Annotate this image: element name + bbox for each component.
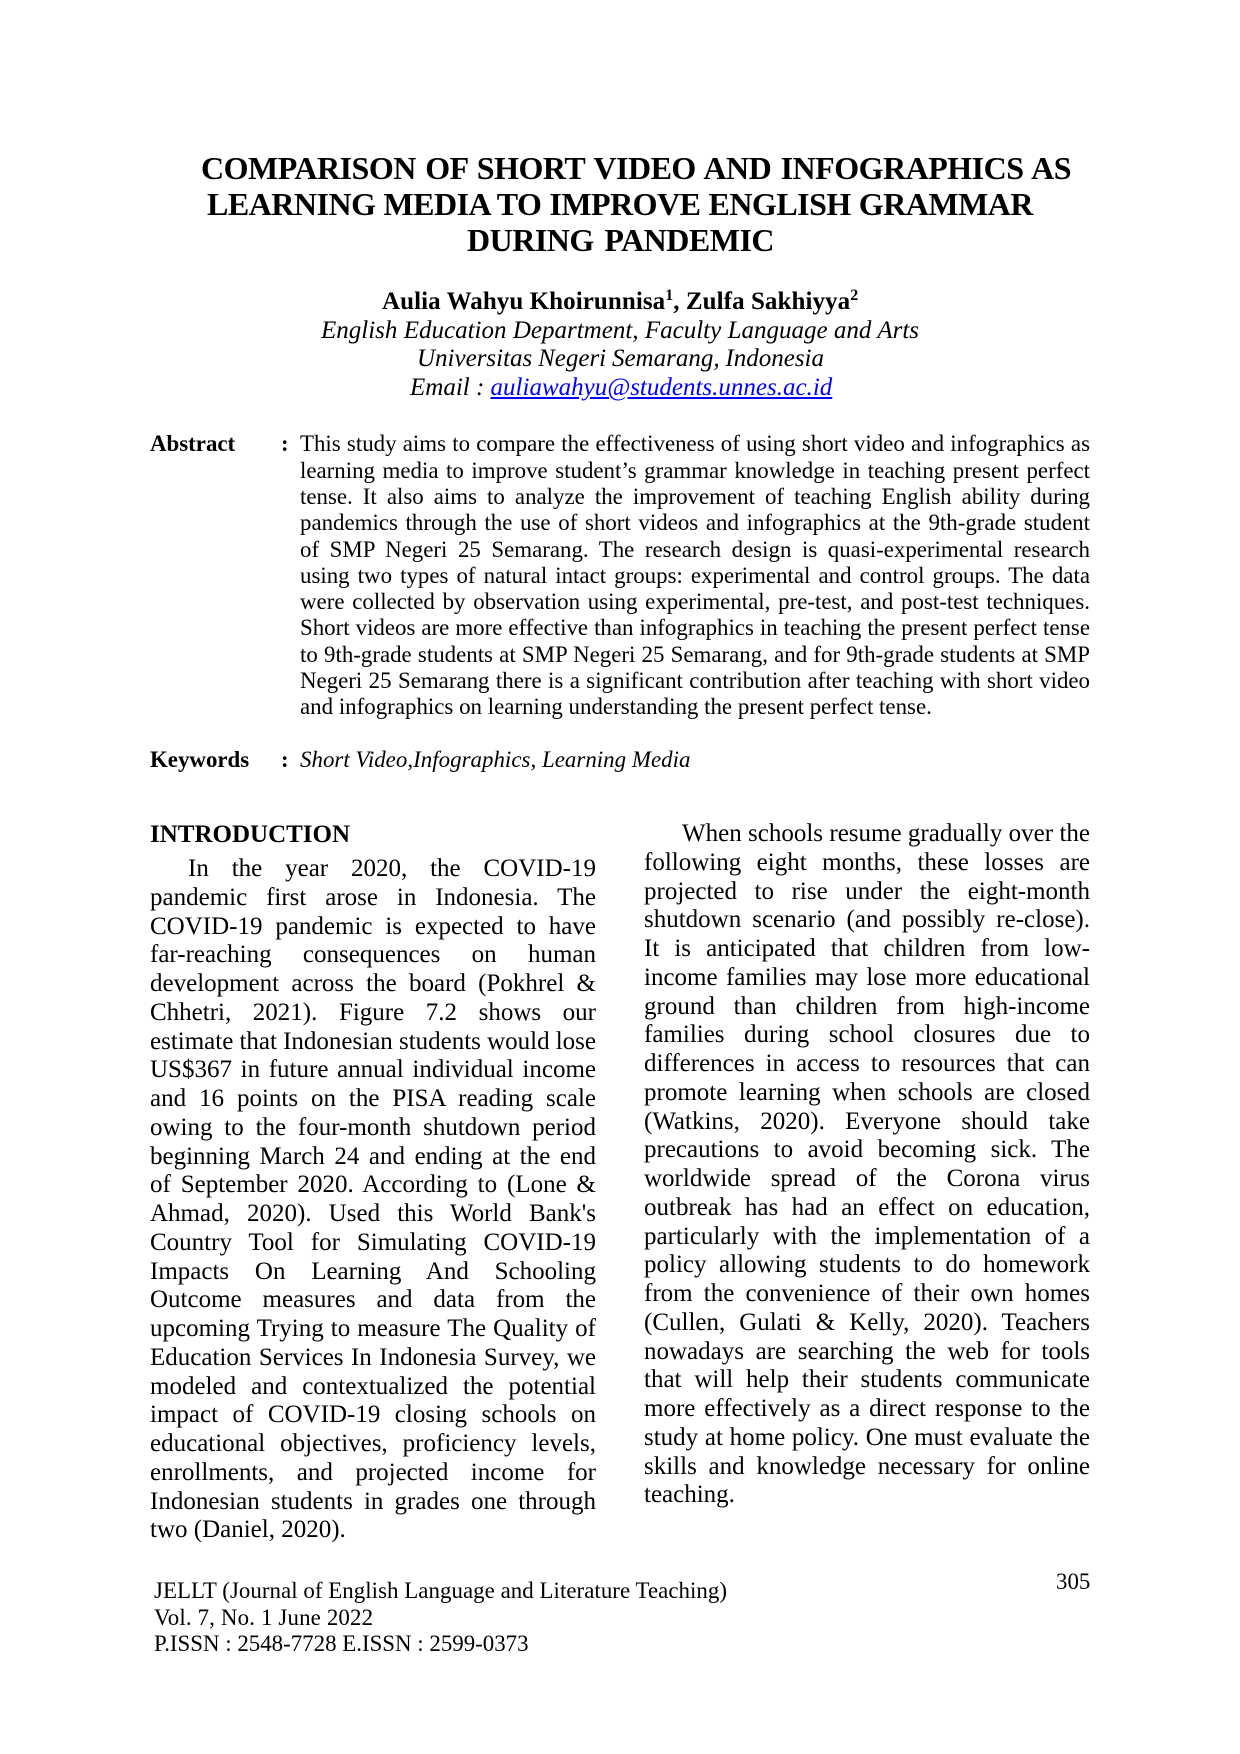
right column: text block: policy allowing students to do homework [644, 1251, 1090, 1278]
footer: journal information: P.ISSN : 2548-7728 E.ISSN : 2599-0373 [154, 1631, 529, 1656]
abstract: Short videos are more effective than infographics in teaching the present perfect tense [300, 615, 1090, 640]
text block: introduction paragraph: upcoming Trying to measure The Quality of [150, 1315, 596, 1342]
text block: introduction paragraph: impact of COVID-19 closing schools on [150, 1401, 596, 1428]
right column: text block [644, 820, 1090, 1508]
abstract: Negeri 25 Semarang there is a significant contribution after teaching with short video [300, 668, 1090, 693]
title: DURING PANDEMIC [467, 222, 774, 258]
right column: text block: ground than children from high-income [644, 992, 1090, 1020]
right column: text block: precautions to avoid becoming sick. The [644, 1136, 1090, 1163]
text block: introduction paragraph: owing to the four-month shutdown period [150, 1114, 596, 1141]
right column: text block: income families may lose more educational [644, 964, 1090, 991]
text block: introduction paragraph: Chhetri, 2021). Figure 7.2 shows our [150, 999, 596, 1026]
text block: introduction paragraph: Country Tool for Simulating COVID-19 [150, 1229, 596, 1256]
text block: introduction paragraph: two (Daniel, 2020). [150, 1516, 346, 1543]
keywords: Short Video,Infographics, Learning Media [300, 747, 691, 772]
title: COMPARISON OF SHORT VIDEO AND INFOGRAPHICS AS [201, 150, 1071, 186]
title: LEARNING MEDIA TO IMPROVE ENGLISH GRAMMAR [207, 186, 1033, 222]
right column: text block: skills and knowledge necessary for online [644, 1452, 1090, 1480]
right column: text block: (Watkins, 2020). Everyone should take [644, 1108, 1090, 1134]
right column: text block: following eight months, these losses are [644, 849, 1090, 876]
authors: Aulia Wahyu Khoirunnisa1, Zulfa Sakhiyya2 [382, 287, 858, 315]
text block: introduction paragraph: beginning March 24 and ending at the end [150, 1142, 596, 1170]
right column: text block: particularly with the implementation of a [644, 1222, 1090, 1250]
text block: introduction paragraph: pandemic first arose in Indonesia. The [150, 884, 596, 911]
text block: introduction paragraph: development across the board (Pokhrel & [150, 970, 596, 997]
text block: introduction paragraph: US$367 in future annual individual income [150, 1056, 596, 1083]
left column: introduction [150, 821, 596, 1543]
right column: text block: nowadays are searching the web for tools [644, 1338, 1090, 1364]
text block: introduction paragraph: modeled and contextualized the potential [150, 1372, 596, 1400]
right column: text block: projected to rise under the eight-month [644, 878, 1090, 904]
abstract: and infographics on learning understanding the present perfect tense. [300, 694, 932, 719]
text block: introduction paragraph: Education Services In Indonesia Survey, we [150, 1344, 596, 1371]
text block: introduction paragraph: educational objectives, proficiency levels, [150, 1430, 596, 1457]
affiliation: English Education Department, Faculty Language and Arts [321, 317, 919, 344]
text block: introduction paragraph: COVID-19 pandemic is expected to have [150, 912, 596, 940]
footer: journal information: Vol. 7, No. 1 June 2022 [154, 1604, 373, 1630]
footer: journal information: JELLT (Journal of English Language and Literature Teaching) [154, 1578, 727, 1603]
right column: text block: families during school closures due to [644, 1021, 1090, 1048]
text block: introduction paragraph: In the year 2020, the COVID-19 [188, 855, 596, 882]
right column: text block: more effectively as a direct response to the [644, 1395, 1090, 1422]
footer: journal information [154, 1578, 727, 1656]
text block: introduction paragraph: of September 2020. According to (Lone & [150, 1171, 596, 1198]
right column: text block: (Cullen, Gulati & Kelly, 2020). Teachers [644, 1309, 1090, 1336]
text block: introduction paragraph: Outcome measures and data from the [150, 1286, 596, 1313]
text block: introduction paragraph: enrollments, and projected income for [150, 1459, 596, 1486]
right column: text block: outbreak has had an effect on education, [644, 1194, 1090, 1221]
heading: introduction: INTRODUCTION [150, 821, 350, 848]
title [201, 150, 1071, 258]
right column: text block: promote learning when schools are closed [644, 1079, 1090, 1106]
right column: text block: worldwide spread of the Corona virus [644, 1165, 1090, 1192]
affiliation [320, 317, 919, 401]
affiliation: Email : auliawahyu@students.unnes.ac.id [410, 374, 832, 401]
text block: introduction paragraph [150, 855, 596, 1543]
abstract: to 9th-grade students at SMP Negeri 25 Semarang, and for 9th-grade students at SMP [300, 642, 1090, 667]
keywords: : [281, 747, 289, 772]
abstract: learning media to improve student’s grammar knowledge in teaching present perfect [300, 458, 1090, 483]
abstract: : [281, 431, 289, 456]
right column: text block: differences in access to resources that can [644, 1050, 1090, 1077]
abstract: of SMP Negeri 25 Semarang. The research design is quasi-experimental research [300, 536, 1090, 562]
right column: text block: that will help their students communicate [644, 1366, 1090, 1393]
text block: introduction paragraph: far-reaching consequences on human [150, 941, 596, 968]
text block: introduction paragraph: and 16 points on the PISA reading scale [150, 1085, 596, 1112]
keywords: Keywords [150, 747, 249, 772]
right column: text block: from the convenience of their own homes [644, 1280, 1090, 1307]
text block: introduction paragraph: Impacts On Learning And Schooling [150, 1258, 596, 1284]
abstract: pandemics through the use of short videos and infographics at the 9th-grade student [300, 510, 1090, 535]
right column: text block: When schools resume gradually over the [682, 820, 1090, 847]
abstract: were collected by observation using experimental, pre-test, and post-test techniques. [300, 589, 1090, 614]
right column: text block: It is anticipated that children from low- [644, 935, 1090, 962]
right column: text block: teaching. [644, 1481, 735, 1508]
abstract: This study aims to compare the effectiveness of using short video and infographics as [300, 431, 1090, 456]
page number: 305 [1056, 1569, 1090, 1594]
text block: introduction paragraph: Ahmad, 2020). Used this World Bank's [150, 1200, 596, 1227]
affiliation: Universitas Negeri Semarang, Indonesia [417, 345, 824, 372]
text block: introduction paragraph: estimate that Indonesian students would lose [150, 1028, 596, 1054]
abstract [150, 431, 1090, 719]
text block: introduction paragraph: Indonesian students in grades one through [150, 1488, 596, 1514]
abstract: using two types of natural intact groups: experimental and control groups. The data [300, 563, 1090, 588]
right column: text block: shutdown scenario (and possibly re-close). [644, 906, 1090, 933]
right column: text block: study at home policy. One must evaluate the [644, 1424, 1090, 1451]
abstract: Abstract [150, 431, 235, 456]
abstract: tense. It also aims to analyze the improvement of teaching English ability during [300, 484, 1090, 509]
